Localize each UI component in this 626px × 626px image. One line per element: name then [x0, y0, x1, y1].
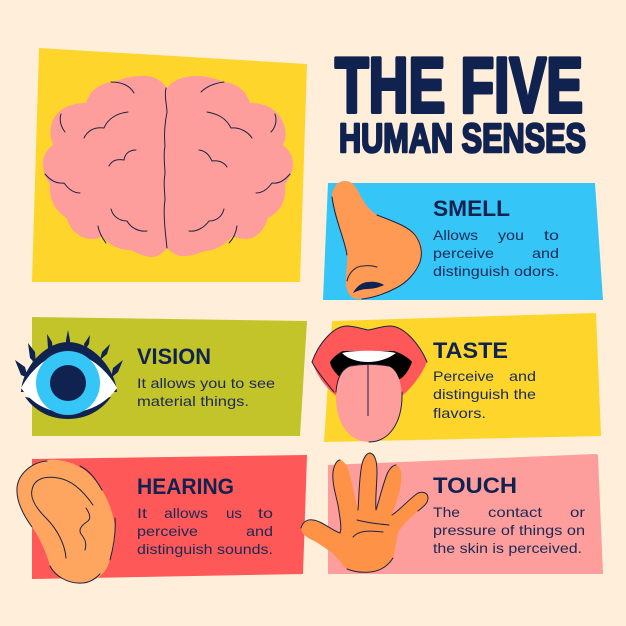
text: touch description: The — [433, 504, 460, 520]
text: taste description: Perceive — [433, 368, 494, 384]
text: hearing description: distinguish sounds. — [137, 541, 273, 557]
text: smell description: you — [498, 227, 524, 243]
panel: touch — [301, 453, 603, 574]
text: hearing description: allows — [164, 505, 208, 521]
text: taste description — [433, 368, 536, 421]
text: hearing description: us — [226, 505, 242, 521]
text: hearing description: It — [137, 505, 147, 521]
text: hearing description: perceive — [137, 523, 198, 539]
text: smell description: distinguish odors. — [433, 263, 559, 279]
text: smell description — [433, 227, 559, 279]
brain folds — [45, 82, 290, 248]
text: smell description: and — [532, 245, 559, 261]
icon: mouth and tongue — [312, 326, 427, 442]
panel: taste — [312, 313, 601, 442]
panel: brain — [32, 48, 307, 282]
text: touch description: pressure of things on — [433, 522, 585, 538]
text: hearing description — [137, 505, 273, 557]
text: taste description: flavors. — [433, 405, 486, 421]
illustration: brain — [43, 76, 293, 257]
icon: nose — [332, 181, 422, 299]
text: vision description — [137, 375, 275, 409]
text: touch description: the skin is perceived. — [433, 540, 582, 556]
text: vision description: material things. — [137, 393, 249, 409]
text: smell description: to — [544, 227, 559, 243]
text: taste description: distinguish the — [433, 386, 536, 402]
text: hearing description: and — [246, 523, 273, 539]
label: smell heading: SMELL — [433, 196, 510, 221]
text: vision description: It allows you to see — [137, 375, 275, 391]
text: touch description: contact — [488, 504, 542, 520]
label: taste heading: TASTE — [433, 338, 508, 363]
text: taste description: and — [509, 368, 536, 384]
title — [335, 41, 586, 161]
icon: eye — [15, 330, 123, 419]
icon: ear — [17, 460, 115, 583]
panel: hearing — [17, 455, 307, 583]
label: touch heading: TOUCH — [433, 473, 517, 498]
text: smell description: perceive — [433, 245, 494, 261]
text: touch description — [433, 504, 585, 556]
panel: smell — [323, 181, 603, 300]
icon: hand — [301, 453, 428, 572]
label: vision heading: VISION — [137, 344, 211, 369]
text: smell description: Allows — [433, 227, 478, 243]
panel: vision — [15, 317, 307, 436]
label: hearing heading: HEARING — [137, 474, 234, 499]
text: touch description: or — [570, 504, 585, 520]
text: hearing description: to — [258, 505, 273, 521]
